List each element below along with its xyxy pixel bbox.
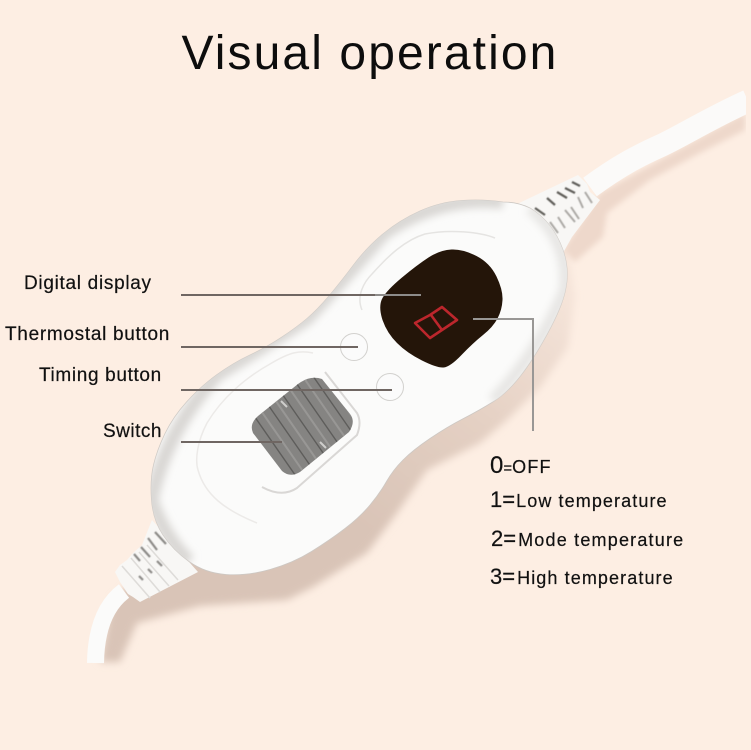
upper cable <box>590 101 748 187</box>
label: timing button: Timing button <box>39 365 162 386</box>
shadow: body <box>100 220 575 662</box>
upper strain relief <box>515 175 600 253</box>
shadow: upper cable <box>563 113 745 262</box>
temperature legend: 3=High temperature <box>490 564 674 589</box>
label: thermostal button: Thermostal button <box>5 324 170 345</box>
title: Visual operation <box>182 27 558 80</box>
label: digital display: Digital display <box>24 273 152 294</box>
switch recess <box>262 372 360 493</box>
digit readout <box>415 307 457 338</box>
thermostat button <box>340 334 368 360</box>
controller body <box>151 200 567 575</box>
label: switch: Switch <box>103 421 162 442</box>
display leader line <box>473 319 533 431</box>
lower cable <box>96 591 124 663</box>
temperature legend: 0=OFF <box>490 452 552 479</box>
timing button <box>376 374 404 400</box>
lower strain relief <box>115 520 198 602</box>
temperature legend <box>490 452 684 589</box>
temperature legend: 1=Low temperature <box>490 487 668 512</box>
switch <box>252 378 353 475</box>
display screen <box>380 249 503 368</box>
temperature legend: 2=Mode temperature <box>491 526 684 551</box>
image edge mask <box>746 80 751 150</box>
